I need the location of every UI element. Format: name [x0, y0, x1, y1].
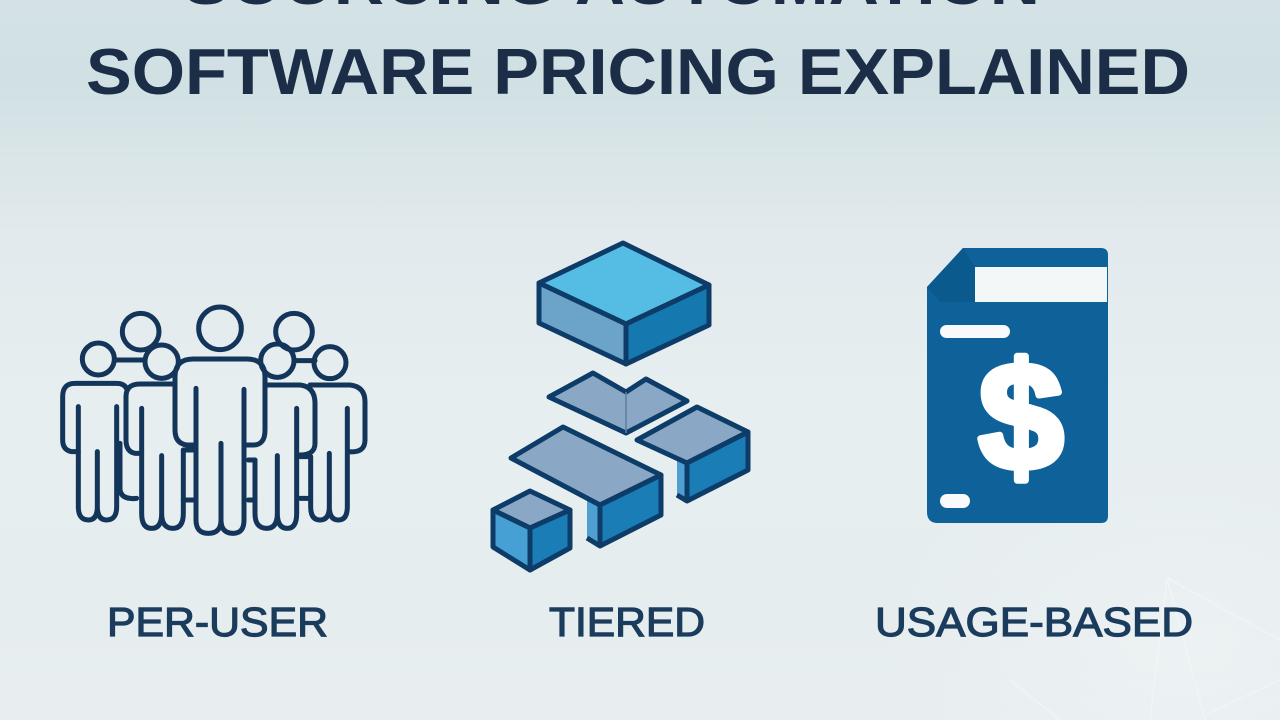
icon: stacked blocks (tiered) — [493, 243, 748, 570]
title — [86, 0, 1190, 108]
icon: group of users (per-user) — [63, 307, 365, 533]
large block — [511, 427, 661, 546]
label: tiered: TIERED — [549, 599, 705, 645]
label: usage-based: USAGE-BASED — [875, 599, 1193, 645]
top block — [539, 243, 709, 364]
title line 2: SOFTWARE PRICING EXPLAINED — [86, 35, 1190, 108]
middle flat piece — [549, 373, 687, 433]
icon: invoice with dollar sign (usage-based) — [927, 248, 1108, 523]
label: per-user: PER-USER — [107, 599, 328, 645]
right block — [637, 407, 748, 501]
small cube — [493, 491, 570, 570]
icon: invoice with dollar sign (usage-based): $ — [979, 332, 1063, 502]
